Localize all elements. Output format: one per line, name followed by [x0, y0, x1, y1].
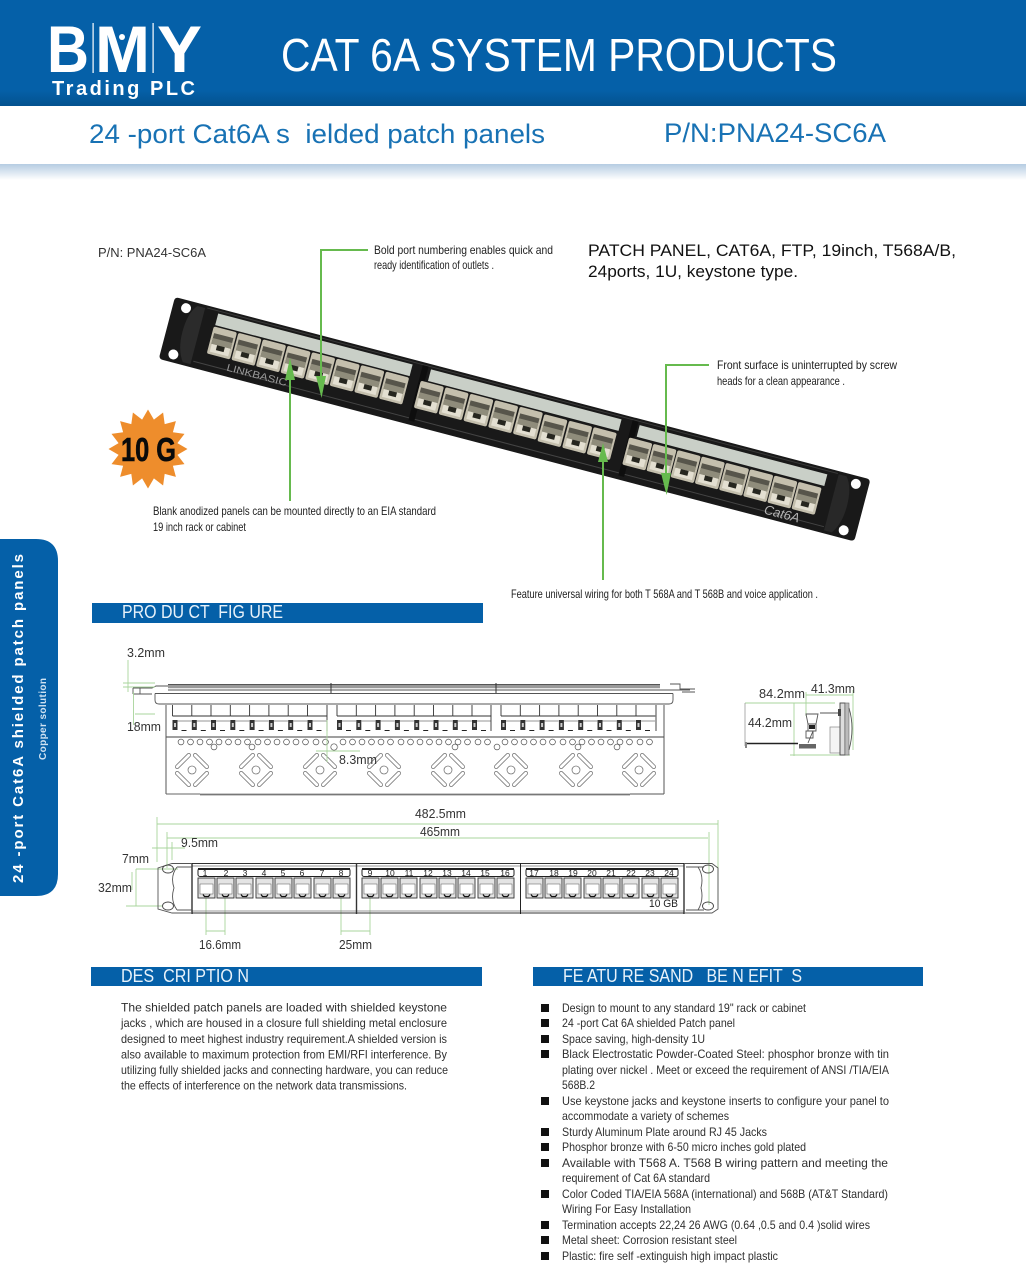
port numbers: 22 [626, 868, 636, 878]
dimension: 465mm: 465mm [420, 825, 460, 839]
logo: BMY Trading PLC: M [95, 12, 150, 86]
feature lines: requirement of Cat 6A standard [562, 1171, 710, 1185]
dimension: 9.5mm: 9.5mm [181, 836, 218, 850]
port numbers: 20 [587, 868, 597, 878]
subtitle band [0, 106, 1026, 180]
dimension: 8.3mm: 8.3mm [339, 753, 377, 767]
patch panel photo [159, 297, 870, 541]
port numbers: 3 [243, 868, 248, 878]
arrow: port numbering [316, 250, 368, 398]
dimension: 25mm: 25mm [339, 938, 372, 952]
port numbers: 24 [664, 868, 674, 878]
title: CAT 6A SYSTEM PRODUCTS [281, 29, 837, 81]
jack ports [206, 326, 822, 515]
feature lines: Space saving, high-density 1U [562, 1032, 705, 1046]
arrow: universal wiring [598, 443, 608, 580]
10 GB mark: 10 GB [649, 898, 678, 910]
dimension: 482.5mm: 482.5mm [415, 807, 466, 821]
port numbers: 7 [320, 868, 325, 878]
drawing: side view [745, 682, 855, 756]
port numbers: 8 [339, 868, 344, 878]
description text [120, 1000, 448, 1092]
callout: blank panels: Blank anodized panels can be mounted directly to an EIA standard [153, 504, 436, 518]
feature lines: Wiring For Easy Installation [562, 1202, 691, 1216]
dimension: 44.2mm: 44.2mm [748, 716, 792, 730]
feature lines: Metal sheet: Corrosion resistant steel [562, 1233, 737, 1247]
10G badge: 10 G [121, 431, 176, 468]
port numbers: 16 [500, 868, 510, 878]
port numbers: 2 [224, 868, 229, 878]
feature lines: Use keystone jacks and keystone inserts to configure your panel to [562, 1094, 889, 1108]
brand mark: LINKBASIC [225, 363, 288, 389]
callout: universal wiring: Feature universal wiring for both T 568A and T 568B and voice application . [511, 587, 818, 601]
side tab: 24 -port Cat6A shielded patch panels [10, 554, 27, 883]
feature lines: Black Electrostatic Powder-Coated Steel: phosphor bronze with tin [562, 1047, 889, 1061]
header banner [0, 0, 1026, 106]
feature lines: Color Coded TIA/EIA 568A (international) and 568B (AT&T Standard) [562, 1187, 888, 1201]
port numbers: 11 [405, 868, 414, 878]
subtitle band: P/N:PNA24-SC6A [664, 118, 886, 148]
port numbers: 10 [385, 868, 395, 878]
description text: jacks , which are housed in a closure full shielding metal enclosure [120, 1016, 447, 1030]
feature lines: Available with T568 A. T568 B wiring pattern and meeting the [562, 1156, 888, 1170]
subtitle band: 24 -port Cat6A s ielded patch panels [89, 119, 545, 149]
heading: features and benefits: FE ATU RE SAND BE N EFIT S [563, 966, 802, 986]
description text: The shielded patch panels are loaded with shielded keystone [121, 1000, 447, 1014]
port numbers: 12 [423, 868, 433, 878]
description text: also available to maximum protection from EMI/RFI interference. By [121, 1048, 447, 1062]
port numbers: 17 [529, 868, 539, 878]
dimension: 41.3mm: 41.3mm [811, 682, 855, 696]
logo: BMY Trading PLC [47, 12, 202, 100]
description text: utilizing fully shielded jacks and connecting hardware, you can reduce [121, 1063, 448, 1077]
heading: description: DES CRI PTIO N [121, 966, 249, 986]
feature lines: Design to mount to any standard 19" rack or cabinet [562, 1001, 807, 1015]
heading: product figure [92, 602, 483, 623]
callout: port numbering [374, 243, 553, 272]
callout: front surface: Front surface is uninterrupted by screw [717, 358, 897, 372]
port numbers: 9 [368, 868, 373, 878]
port numbers: 1 [203, 868, 208, 878]
feature lines: Phosphor bronze with 6-50 micro inches gold plated [562, 1140, 806, 1154]
Cat6A mark: Cat6A [763, 502, 801, 525]
arrow: front surface [661, 365, 709, 495]
port numbers: 5 [281, 868, 286, 878]
description text: the effects of interference on the network data transmissions. [121, 1078, 407, 1092]
part number label: P/N: PNA24-SC6A [98, 245, 206, 260]
callout: port numbering: ready identification of outlets . [374, 258, 494, 272]
logo: BMY Trading PLC: B [47, 12, 89, 86]
port numbers: 23 [645, 868, 655, 878]
port numbers: 18 [549, 868, 559, 878]
product headline [588, 241, 956, 281]
bullets [541, 1004, 549, 1260]
feature lines: accommodate a variety of schemes [562, 1109, 729, 1123]
dimension: 16.6mm: 16.6mm [199, 938, 241, 952]
dimension: 32mm: 32mm [98, 881, 132, 895]
heading: product figure: PRO DU CT FIG URE [122, 602, 283, 622]
feature lines [562, 1001, 889, 1263]
product headline: 24ports, 1U, keystone type. [588, 262, 798, 281]
callout: port numbering: Bold port numbering enables quick and [374, 243, 553, 257]
drawing: top view [123, 646, 695, 794]
port numbers: 15 [480, 868, 490, 878]
dimension: 3.2mm: 3.2mm [127, 646, 165, 660]
mounting holes [167, 302, 862, 536]
port numbers: 19 [568, 868, 578, 878]
port numbers: 4 [262, 868, 267, 878]
feature lines: plating over nickel . Meet or exceed the requirement of ANSI /TIA/EIA [562, 1063, 889, 1077]
label strips [215, 314, 828, 486]
callout: front surface: heads for a clean appearance . [717, 374, 845, 388]
heading: features and benefits [533, 966, 923, 986]
side tab [0, 539, 58, 896]
arrow: blank panels [285, 358, 295, 501]
callout: front surface [717, 358, 897, 388]
callout: blank panels: 19 inch rack or cabinet [153, 520, 247, 534]
port numbers [203, 868, 674, 878]
dimension: 18mm: 18mm [127, 720, 161, 734]
port numbers: 13 [442, 868, 452, 878]
features list [541, 1001, 889, 1263]
side tab: Copper solution [38, 678, 49, 760]
logo: BMY Trading PLC: Trading PLC [52, 78, 195, 100]
heading: description [91, 966, 482, 986]
feature lines: Plastic: fire self -extinguish high impact plastic [562, 1249, 778, 1263]
feature lines: 568B.2 [562, 1078, 595, 1092]
dimension: 84.2mm: 84.2mm [759, 687, 805, 701]
10G badge [108, 410, 188, 488]
feature lines: 24 -port Cat 6A shielded Patch panel [562, 1016, 735, 1030]
dimension: 7mm: 7mm [122, 852, 149, 866]
port numbers: 14 [461, 868, 471, 878]
feature lines: Sturdy Aluminum Plate around RJ 45 Jacks [562, 1125, 767, 1139]
feature lines: Termination accepts 22,24 26 AWG (0.64 ,0.5 and 0.4 )solid wires [562, 1218, 870, 1232]
drawing: front view [98, 807, 718, 952]
logo: BMY Trading PLC: Y [157, 12, 202, 86]
callout: blank panels [153, 504, 436, 534]
port numbers: 21 [606, 868, 616, 878]
description text: designed to meet highest industry requirement.A shielded version is [121, 1032, 447, 1046]
product headline: PATCH PANEL, CAT6A, FTP, 19inch, T568A/B, [588, 241, 956, 260]
port numbers: 6 [300, 868, 305, 878]
